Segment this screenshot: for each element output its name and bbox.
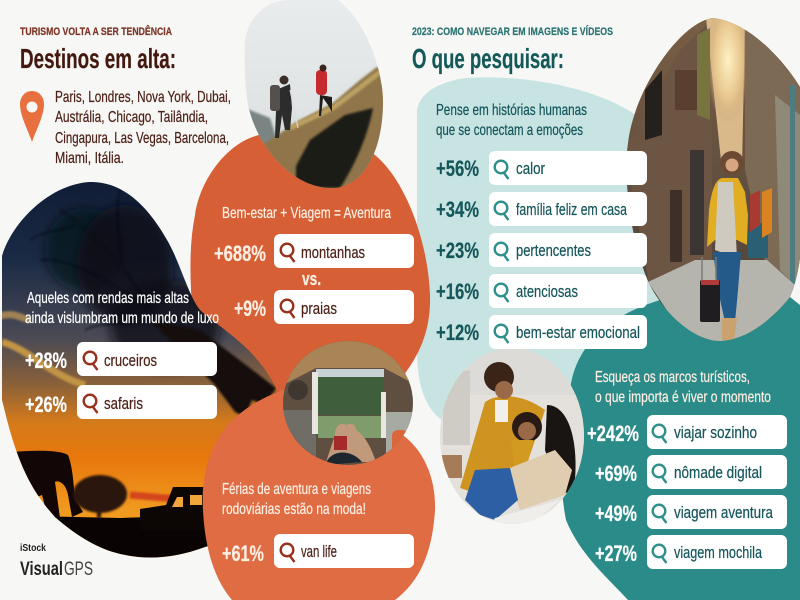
photo: tree trunk xyxy=(150,320,276,417)
stat: viagem aventura: viagem aventura xyxy=(674,503,773,522)
photo: right building xyxy=(745,20,800,300)
stat: van life: van life xyxy=(301,542,337,561)
photo: woman in alley xyxy=(627,18,800,341)
stat: calor: +56% xyxy=(436,156,479,181)
photo: woman xyxy=(545,405,576,495)
photo: shopfront colours xyxy=(762,188,772,238)
panel: orange lower blob xyxy=(203,388,435,600)
photo: small tree xyxy=(73,475,127,518)
heading: o que pesquisar: O que pesquisar: xyxy=(412,43,564,74)
text: destination list xyxy=(55,89,231,167)
stat: viagem mochila: viagem mochila xyxy=(674,543,762,562)
photo: distant hills xyxy=(249,108,276,155)
photo: cliff xyxy=(262,67,390,190)
stat: praias: +9% xyxy=(234,296,266,321)
stat: van life: +61% xyxy=(222,541,264,566)
text: human stories heading: Pense em histórias humanas xyxy=(436,102,587,119)
stat: bem-estar emocional: bem-estar emocional xyxy=(516,323,640,342)
text: destination list: Cingapura, Las Vegas, Barcelona, xyxy=(55,130,229,147)
stat: familia feliz em casa: +34% xyxy=(436,197,479,222)
panel: dark teal blob xyxy=(562,297,800,600)
logo: iStock Visual GPS xyxy=(20,543,93,580)
photo: elephant xyxy=(12,451,83,518)
stat: safaris: safaris xyxy=(104,394,143,413)
stat: safaris: +26% xyxy=(25,392,67,417)
photo: wall ornament xyxy=(288,380,308,400)
stat: cruceiros: +28% xyxy=(25,348,67,373)
logo: iStock Visual GPS: iStock xyxy=(20,543,46,554)
stat: viagem aventura xyxy=(595,495,787,529)
icon: map pin xyxy=(20,91,44,142)
text: destination list: Paris, Londres, Nova York, Dubai, xyxy=(55,89,231,106)
stat: praias xyxy=(234,290,414,324)
photo: tree branches xyxy=(30,191,121,331)
text: road trip heading xyxy=(222,481,371,518)
photo: balcony plants xyxy=(697,28,710,120)
text: destination list: Austrália, Chicago, Tailândia, xyxy=(55,109,208,126)
photo: family on sofa xyxy=(438,346,588,526)
stat: viajar sozinho: +242% xyxy=(587,421,639,446)
stat: viagem aventura: +49% xyxy=(595,501,637,526)
stat: pertencentes xyxy=(436,233,647,267)
stat: viagem mochila xyxy=(595,535,787,569)
photo: man xyxy=(460,396,545,492)
photo: van interior xyxy=(280,340,416,470)
text: luxury heading: ainda vislumbram um mundo de luxo xyxy=(25,310,219,327)
photo: pavement xyxy=(648,260,795,345)
text: destination list: Miami, Itália. xyxy=(55,150,124,167)
stat: nomade digital: nômade digital xyxy=(674,463,762,482)
photo: side walls xyxy=(284,410,316,457)
stat: van life xyxy=(222,534,414,568)
panel: light teal blob xyxy=(417,77,660,422)
stat: atenciosas xyxy=(436,274,647,308)
text: luxury heading: Aqueles com rendas mais altas xyxy=(27,290,189,307)
stat: nomade digital xyxy=(595,455,787,489)
logo: iStock Visual GPS: GPS xyxy=(64,559,93,580)
photo: central light xyxy=(706,18,745,170)
photo: sunset clouds xyxy=(0,315,190,500)
photo: hikers xyxy=(240,0,390,190)
photo: child xyxy=(512,412,542,442)
stat: praias: praias xyxy=(301,299,337,318)
photo: jeans xyxy=(465,468,518,520)
stat: cruceiros xyxy=(25,342,217,376)
stat: nomade digital: +69% xyxy=(595,461,637,486)
photo: hiker left xyxy=(270,76,298,138)
stat: bem-estar emocional xyxy=(436,315,647,349)
photo: wood ceiling xyxy=(286,341,409,384)
stat: montanhas xyxy=(214,234,414,268)
stat: pertencentes: +23% xyxy=(436,238,479,263)
panel: safari photo xyxy=(2,182,276,558)
text: adventure heading: Bem-estar + Viagem = Aventura xyxy=(222,205,391,222)
stat: viajar sozinho xyxy=(587,415,787,449)
heading: left eyebrow: TURISMO VOLTA A SER TENDÊNCIA xyxy=(20,25,172,38)
photo: tree canopy xyxy=(45,205,220,370)
logo: iStock Visual GPS: Visual xyxy=(20,559,63,580)
text: human stories heading: que se conectam a emoções xyxy=(436,122,583,139)
photo: jeep xyxy=(140,487,204,518)
heading: destinos em alta: Destinos em alta: xyxy=(20,43,176,74)
stat: safaris xyxy=(25,385,217,419)
stat: montanhas: +688% xyxy=(214,241,266,266)
text: versus: vs. xyxy=(302,269,321,289)
stat: atenciosas: atenciosas xyxy=(516,282,578,301)
photo: van window xyxy=(318,377,384,415)
text: human stories heading xyxy=(436,102,587,139)
text: road trip heading: Férias de aventura e viagens xyxy=(222,481,371,498)
stat: familia feliz em casa xyxy=(436,192,647,226)
panel: orange top blob xyxy=(190,130,430,400)
stat: familia feliz em casa: família feliz em casa xyxy=(516,200,627,219)
heading: right eyebrow: 2023: COMO NAVEGAR EM IMAGENS E VÍDEOS xyxy=(412,25,613,38)
photo: left building xyxy=(625,20,712,290)
photo: sofa xyxy=(442,395,584,498)
stat: viajar sozinho: viajar sozinho xyxy=(674,423,757,442)
stat: atenciosas: +16% xyxy=(436,279,479,304)
stat: calor xyxy=(436,151,647,185)
text: road trip heading: rodoviárias estão na moda! xyxy=(222,501,366,518)
photo: woman xyxy=(700,151,748,340)
photo: sofa front xyxy=(494,500,559,524)
stat: pertencentes: pertencentes xyxy=(516,241,591,260)
stat: viagem mochila: +27% xyxy=(595,541,637,566)
stat: cruceiros: cruceiros xyxy=(104,351,157,370)
stat: bem-estar emocional: +12% xyxy=(436,320,479,345)
stat: montanhas: montanhas xyxy=(301,243,365,262)
text: luxury heading xyxy=(25,290,219,327)
photo: hiker right xyxy=(316,64,332,116)
text: live the moment heading xyxy=(595,369,771,406)
photo: ground silhouette xyxy=(54,516,208,558)
photo: couple xyxy=(326,424,376,462)
stat: calor: calor xyxy=(516,159,545,178)
